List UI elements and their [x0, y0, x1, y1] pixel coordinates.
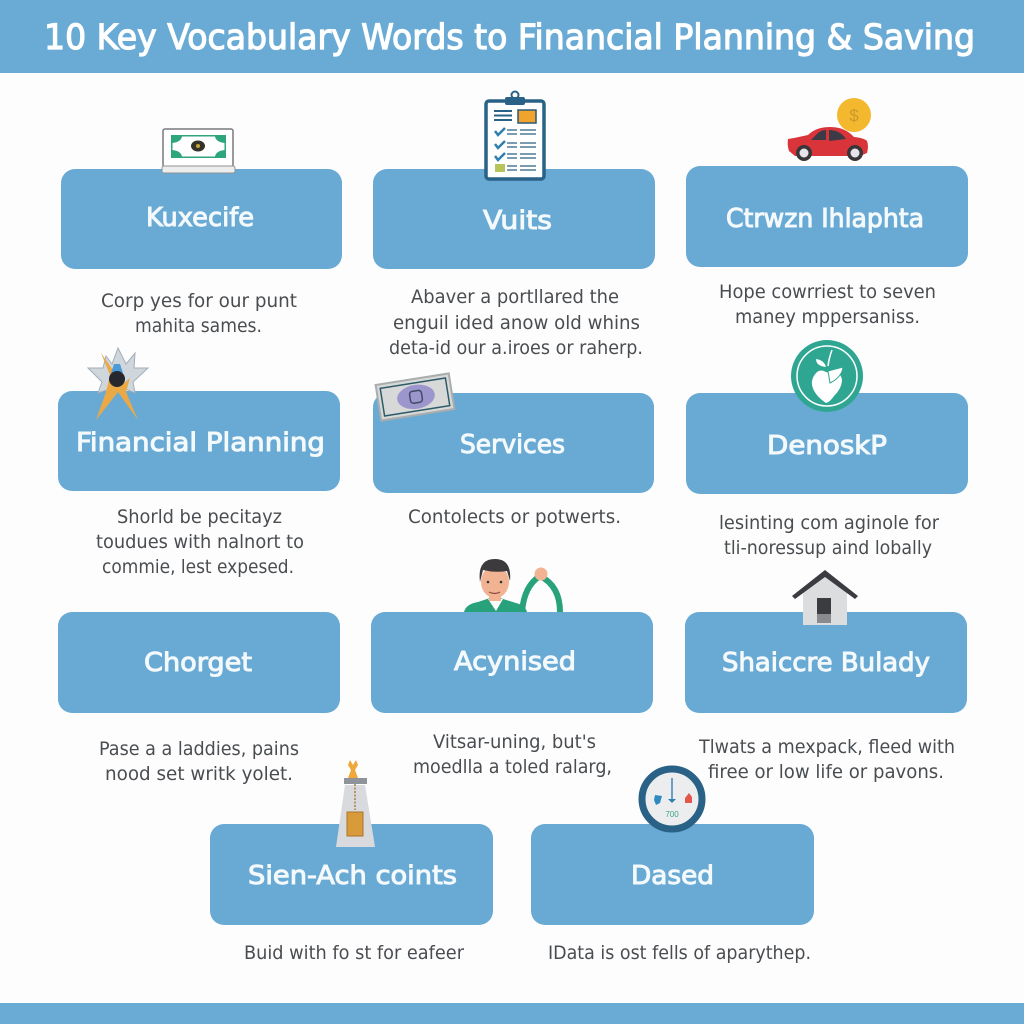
panel: Shaiccre Bulady: firee or low life or pavons. [708, 761, 944, 783]
panel: Financial Planning: Shorld be pecitayz [117, 506, 282, 528]
icon: gauge dial [642, 769, 702, 829]
footer band [0, 1003, 1024, 1024]
panel: DenoskP: DenoskP [767, 431, 887, 461]
icon: bottle with tag [336, 760, 375, 847]
icon: clipboard checklist [486, 92, 544, 179]
panel: Ctrwzn Ihlaphta: Hope cowrriest to seven [719, 281, 936, 303]
panel: Vuits: Abaver a portllared the [411, 286, 619, 308]
panel: Ctrwzn Ihlaphta: Ctrwzn Ihlaphta [726, 204, 924, 234]
title: 10 Key Vocabulary Words to Financial Planning & Saving [44, 18, 975, 58]
panel: Ctrwzn Ihlaphta [686, 166, 968, 328]
panel: Kuxecife: Kuxecife [146, 203, 254, 233]
icon: car and coin: $ [849, 106, 859, 125]
panel: Financial Planning [58, 391, 340, 578]
panel: Acynised: moedlla a toled ralarg, [413, 756, 612, 778]
panel: Shaiccre Bulady [685, 612, 967, 783]
panel: Vuits: deta-id our a.iroes or raherp. [389, 337, 643, 359]
panel: Services: Contolects or potwerts. [408, 506, 621, 528]
panel: Kuxecife: Corp yes for our punt [101, 290, 297, 312]
panel: Kuxecife: mahita sames. [135, 315, 262, 337]
panel: Financial Planning: toudues with nalnort to [96, 531, 304, 553]
icon: gauge dial: 700 [665, 810, 679, 819]
panel: Chorget [58, 612, 340, 785]
panel: Financial Planning: commie, lest expesed. [102, 556, 294, 578]
panel: Ctrwzn Ihlaphta: maney mppersaniss. [735, 306, 920, 328]
panel: Kuxecife [61, 169, 342, 337]
panel: Vuits: enguil ided anow old whins [393, 312, 640, 334]
panel: Chorget: Chorget [144, 648, 252, 678]
panel: Dased [531, 824, 814, 964]
panel: Acynised: Vitsar-uning, but's [433, 731, 596, 753]
panel: DenoskP: lesinting com aginole for [719, 512, 939, 534]
icon: person with raised arm [464, 559, 560, 612]
panel: Vuits [373, 169, 655, 359]
panel: Acynised [371, 612, 653, 778]
panel: DenoskP: tli-noressup aind lobally [724, 537, 932, 559]
panel: Shaiccre Bulady: Shaiccre Bulady [722, 648, 930, 678]
panel: Chorget: nood set writk yolet. [105, 763, 293, 785]
panel: Services [373, 393, 654, 528]
icon: tilted banknote [376, 373, 454, 421]
panel: Sien-Ach coints: Buid with fo st for eafeer [244, 942, 464, 964]
panel: Dased: IData is ost fells of aparythep. [548, 942, 811, 964]
panel: DenoskP [686, 393, 968, 559]
panel: Acynised: Acynised [454, 647, 576, 677]
panel: Chorget: Pase a a laddies, pains [99, 738, 299, 760]
icon: apple badge [791, 340, 863, 412]
panel: Sien-Ach coints [210, 824, 493, 964]
icon: car and coin [788, 98, 871, 161]
panel: Financial Planning: Financial Planning [76, 428, 325, 458]
icon: star burst [88, 348, 148, 420]
icon: house [792, 570, 858, 625]
panel: Services: Services [460, 430, 565, 460]
panel: Vuits: Vuits [483, 206, 552, 236]
panel: Shaiccre Bulady: Tlwats a mexpack, fleed with [698, 736, 955, 758]
header banner [0, 0, 1024, 73]
panel: Dased: Dased [631, 861, 714, 891]
icon: banknote laptop [162, 129, 235, 173]
panel: Sien-Ach coints: Sien-Ach coints [248, 861, 457, 891]
